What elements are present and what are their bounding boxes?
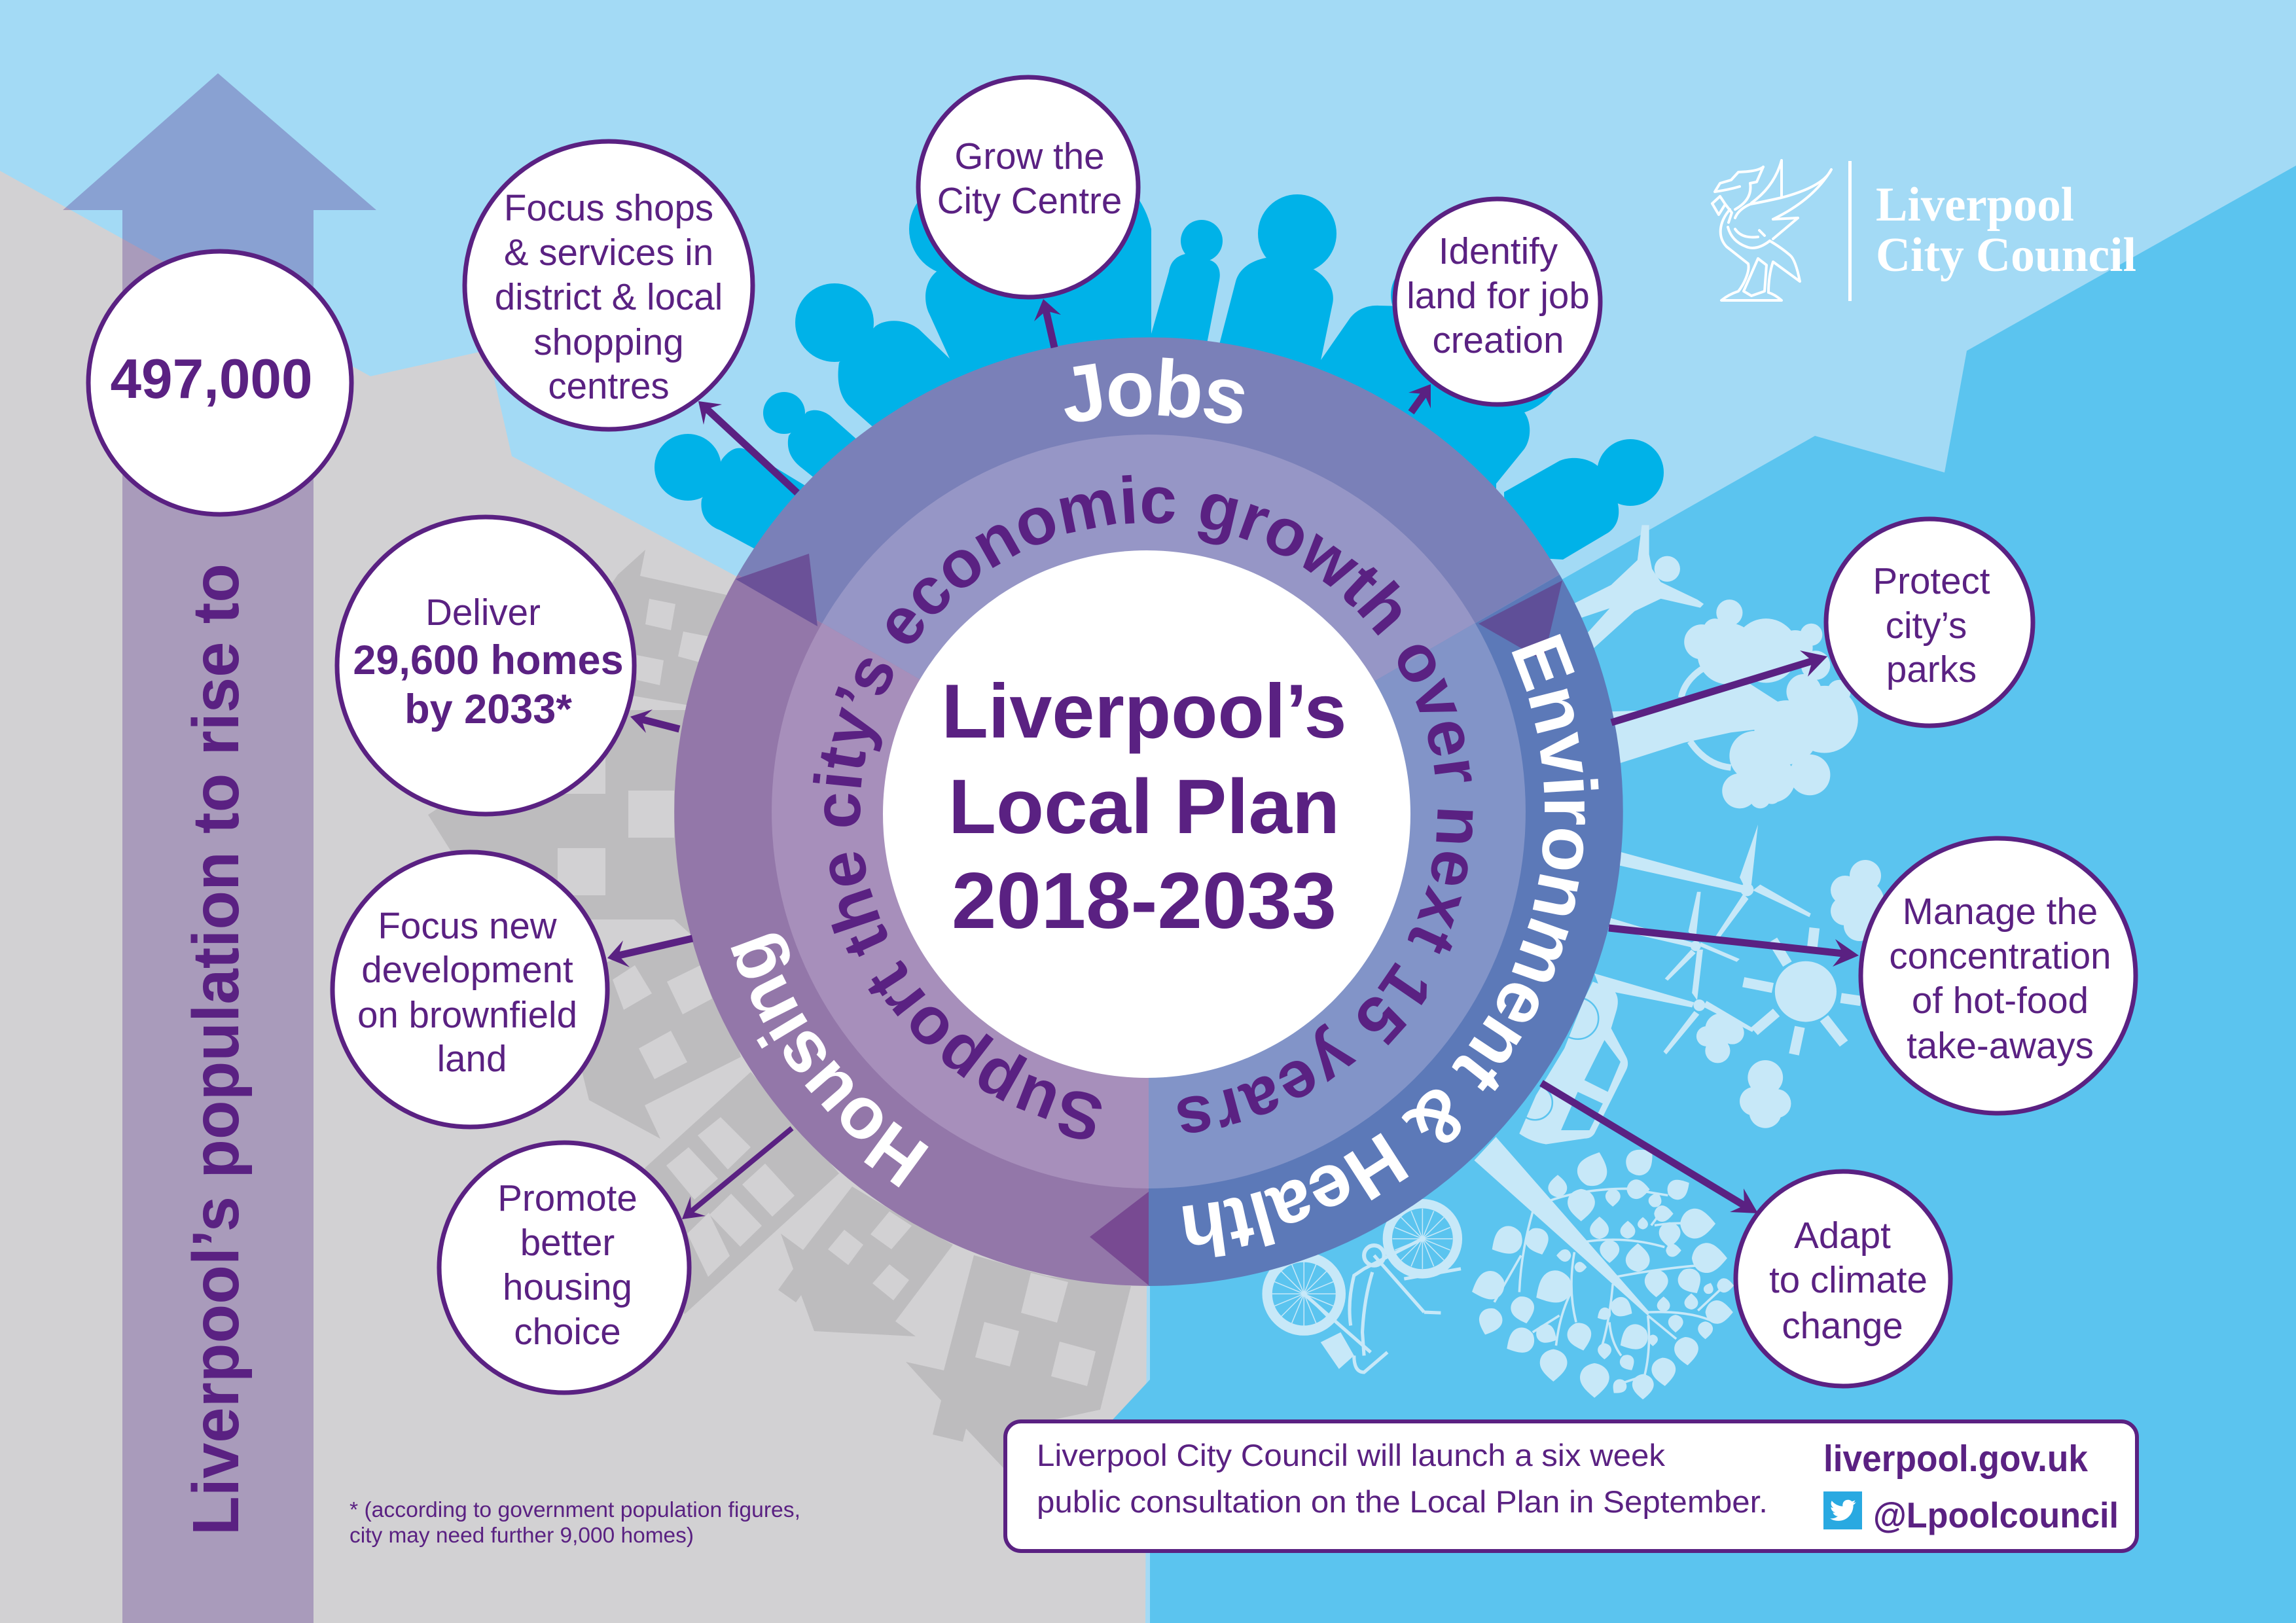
bubble: Identify land: land for job — [1407, 275, 1590, 316]
arrow: city centre — [1034, 299, 1061, 348]
bubble: Protect parks: city’s — [1886, 605, 1967, 646]
footnote — [350, 1497, 800, 1547]
bubble: Protect parks: Protect — [1873, 560, 1990, 601]
bubble: Adapt climate — [1736, 1171, 1950, 1386]
bubble: Promote housing: better — [520, 1222, 615, 1263]
environment: bicycle — [1267, 1204, 1461, 1372]
consultation box: Liverpool City Council will launch a six week — [1037, 1438, 1666, 1472]
title: Liverpool’s — [941, 668, 1347, 754]
bubble: Deliver homes: Deliver — [425, 592, 541, 633]
central ring — [674, 338, 1623, 1286]
consultation box: public consultation on the Local Plan in September. — [1037, 1484, 1768, 1519]
bubble: Focus brownfield: development — [361, 949, 573, 990]
footnote: * (according to government population figures, — [350, 1497, 800, 1522]
ring text: aim: Support the city’s economic growth over next 15 years — [813, 475, 1473, 1139]
bubble: Grow the City Centre — [918, 77, 1138, 297]
bubble: Promote housing: choice — [514, 1311, 621, 1352]
title: 2018-2033 — [952, 856, 1336, 945]
houses silhouettes — [428, 550, 1131, 1468]
bubble: Promote housing: Promote — [497, 1177, 637, 1219]
logo: Liverpool City Council — [1712, 160, 2136, 301]
bubble: Manage hot-food: take-aways — [1907, 1025, 2094, 1066]
ring: housing segment — [674, 575, 1149, 1286]
environment: cloud beside hot-food bubble — [1831, 860, 1884, 941]
bubble: Identify land — [1395, 199, 1600, 404]
logo: Liverpool City Council: City Council — [1876, 228, 2136, 282]
bubble: Promote housing: housing — [503, 1266, 632, 1308]
arrow: job land — [1408, 384, 1431, 412]
bubble: Protect parks: parks — [1886, 649, 1977, 690]
bubble: Focus shops: Focus shops — [504, 187, 713, 228]
bubble: Focus shops: shopping — [533, 321, 684, 363]
arrow: shops — [698, 401, 797, 493]
consultation box — [1005, 1421, 2137, 1551]
population arrow — [63, 73, 376, 1623]
bubble: 497,000 — [88, 251, 351, 514]
consultation box: @Lpoolcouncil — [1873, 1495, 2119, 1535]
bubble: Adapt climate: to climate — [1769, 1259, 1928, 1300]
bubble: Grow the City Centre: Grow the — [954, 135, 1105, 177]
bubble: Adapt climate: change — [1782, 1305, 1903, 1346]
bubble: 497,000: 497,000 — [110, 348, 313, 410]
arrow: hot-food — [1609, 928, 1859, 967]
bubble: Adapt climate: Adapt — [1794, 1215, 1891, 1256]
icon: liver bird — [1712, 160, 1831, 300]
bubble: Manage hot-food: of hot-food — [1912, 980, 2089, 1021]
arrow: brownfield — [607, 938, 692, 967]
environment: van — [1518, 982, 1628, 1144]
ring label: Housing: Housing — [730, 933, 929, 1187]
bubble: Manage hot-food: concentration — [1889, 935, 2111, 976]
arrow: parks — [1611, 651, 1827, 722]
bubble: Protect parks — [1826, 519, 2033, 726]
environment: leafy tree — [1467, 1137, 1734, 1399]
bubble: Focus shops: centres — [548, 365, 670, 406]
bubble: Manage hot-food: Manage the — [1903, 891, 2098, 932]
bubble: Focus shops: district & local — [495, 276, 723, 317]
bubble: Deliver homes: 29,600 homes — [353, 637, 624, 683]
arrow: climate — [1541, 1083, 1758, 1213]
bubble: Focus brownfield — [332, 852, 607, 1127]
consultation box: liverpool.gov.uk — [1823, 1438, 2088, 1480]
bubble: Focus brownfield: land — [437, 1038, 507, 1079]
logo divider — [1848, 161, 1852, 301]
background: grey housing land — [0, 171, 1149, 1623]
background: blue environment land — [1106, 166, 2296, 1623]
bubble: Identify land: Identify — [1439, 230, 1558, 272]
footnote: city may need further 9,000 homes) — [350, 1523, 694, 1547]
ring: segment pointers — [736, 554, 1562, 1285]
bubble: Identify land: creation — [1432, 319, 1564, 361]
ring: environment segment — [1149, 575, 1623, 1286]
ring label: Environment & Health: Environment & Health — [1182, 633, 1598, 1257]
arrow: housing choice — [682, 1128, 792, 1219]
vertical population label: Liverpool’s population to rise to — [179, 563, 253, 1535]
centre disc — [883, 550, 1410, 1078]
ring label: Jobs: Jobs — [1064, 357, 1244, 424]
bubble: Focus shops — [465, 141, 753, 429]
bubble: Manage hot-food — [1861, 838, 2136, 1113]
bubble: Focus brownfield: Focus new — [378, 905, 557, 946]
environment: wind turbines, sun and clouds — [1594, 825, 1861, 1128]
title: Local Plan — [948, 764, 1340, 850]
icon: twitter — [1823, 1491, 1862, 1529]
bubble: Promote housing — [439, 1143, 689, 1393]
bubble: Focus brownfield: on brownfield — [357, 994, 577, 1035]
environment: park tree — [1596, 599, 1858, 808]
ring: jobs segment — [738, 337, 1560, 812]
title — [941, 668, 1347, 945]
bubble: Grow the City Centre: City Centre — [937, 180, 1122, 221]
bubble: Deliver homes: by 2033* — [404, 687, 572, 732]
bubble: Focus shops: & services in — [504, 232, 713, 273]
logo: Liverpool City Council: Liverpool — [1876, 178, 2074, 232]
arrow: homes — [630, 709, 679, 733]
environment: person figure — [1568, 525, 1704, 654]
bubble: Deliver homes — [337, 517, 634, 814]
people silhouettes — [655, 183, 1664, 560]
